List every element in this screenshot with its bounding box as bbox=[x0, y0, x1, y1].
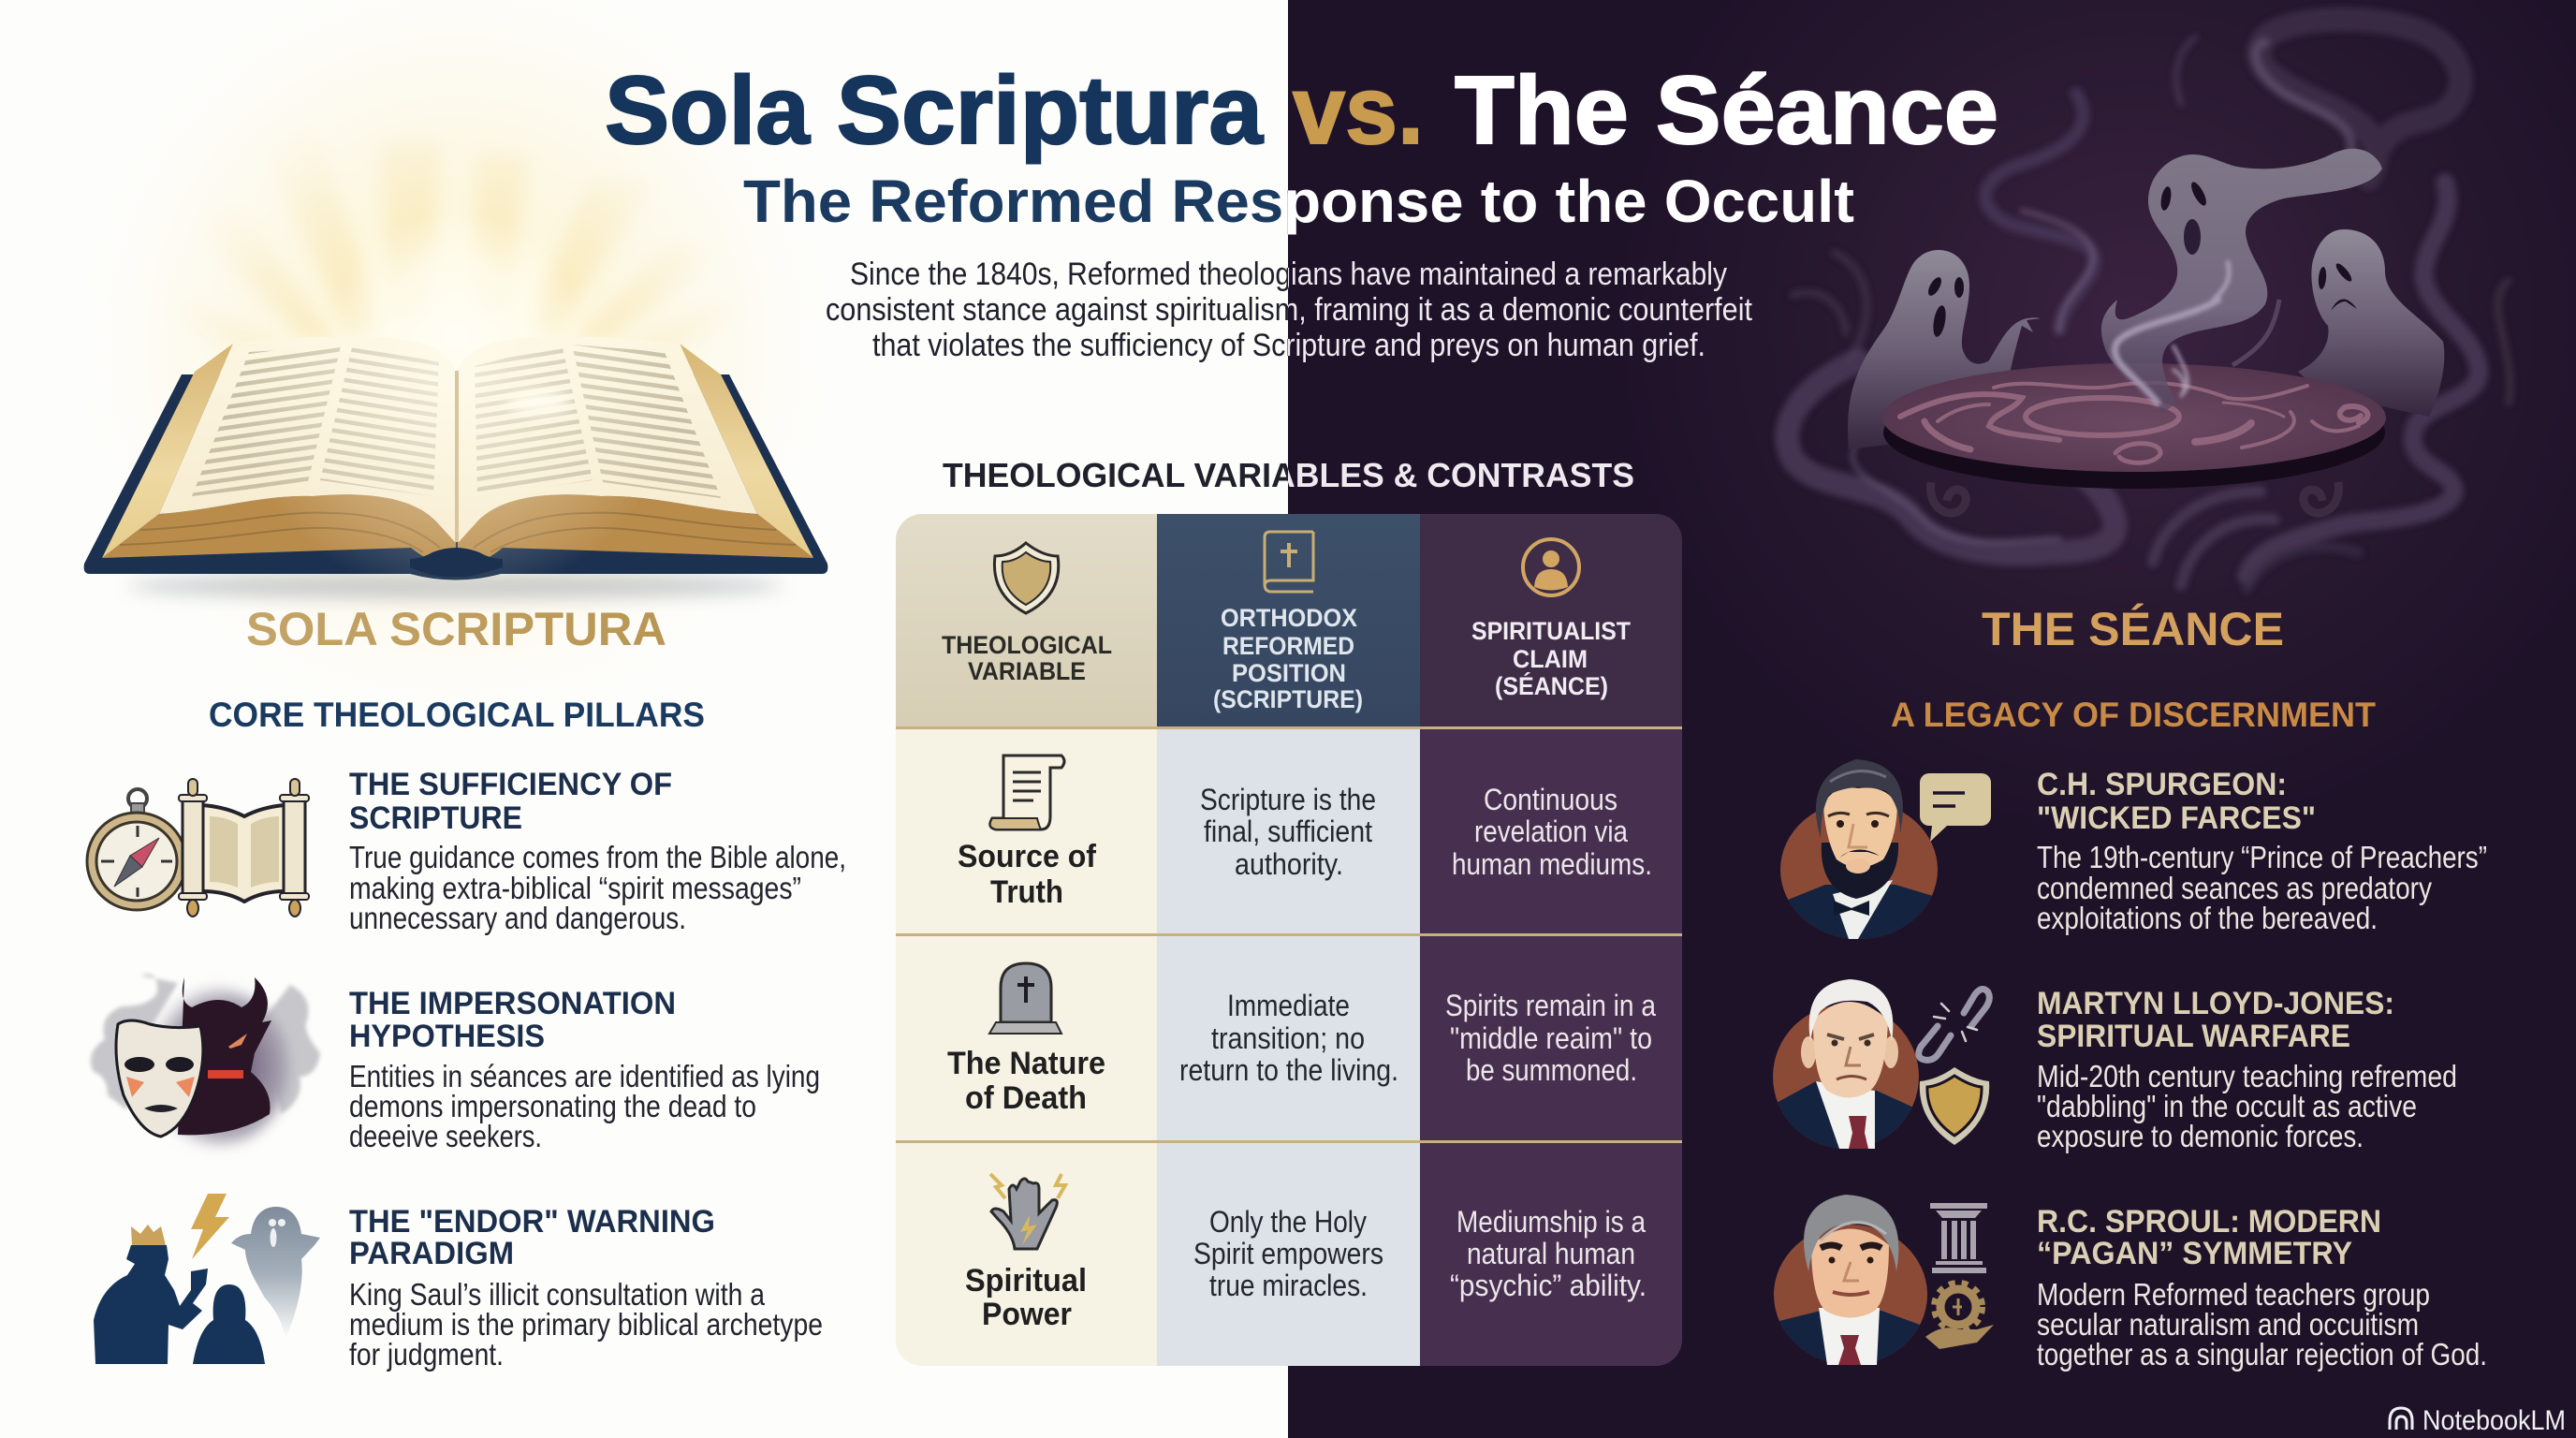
row: the nature of death: "middle reaim" to bbox=[1450, 1021, 1652, 1055]
subtitle: The Reformed Response to the Occult bbox=[743, 168, 1854, 235]
icon: gear and hand bbox=[1925, 1283, 1994, 1349]
Spurgeon text: exploitations of the bereaved. bbox=[2037, 901, 2378, 935]
icon: scroll bbox=[990, 756, 1064, 829]
Spurgeon heading bbox=[2037, 767, 2316, 836]
ghost right bbox=[2298, 229, 2444, 417]
intro paragraph: consistent stance against spiritualism, framing it as a demonic counterfeit bbox=[826, 292, 1752, 328]
Lloyd-Jones heading: MARTYN LLOYD-JONES: bbox=[2037, 986, 2394, 1021]
row: spiritual power: Power bbox=[982, 1297, 1072, 1332]
portrait: Lloyd-Jones bbox=[1764, 979, 1928, 1156]
comparison table bbox=[896, 514, 1682, 1366]
row: source of truth: Continuous bbox=[1484, 783, 1617, 816]
row: source of truth: authority. bbox=[1235, 847, 1343, 881]
icon: speech bubble bbox=[1920, 773, 1991, 842]
gilded page block bbox=[102, 344, 813, 558]
intro paragraph bbox=[826, 257, 1752, 363]
séance background glow bbox=[1610, 0, 2576, 843]
heading: Sola Scriptura: SOLA SCRIPTURA bbox=[246, 603, 666, 655]
column header: orthodox reformed position: ORTHODOX bbox=[1221, 604, 1357, 632]
intro paragraph: that violates the sufficiency of Scripture and preys on human grief. bbox=[872, 328, 1705, 363]
column header: orthodox reformed position bbox=[1213, 532, 1363, 713]
Sproul text: Modern Reformed teachers group bbox=[2037, 1277, 2430, 1312]
spine bbox=[410, 548, 503, 577]
row: source of truth: Scripture is the bbox=[1200, 783, 1376, 816]
icon: NotebookLM mark bbox=[2390, 1408, 2412, 1430]
pillar 1 text bbox=[349, 840, 846, 935]
ghost left bbox=[1848, 250, 2041, 449]
panel: pillar 2 impersonation hypothesis bbox=[91, 974, 820, 1153]
row: spiritual power: true miracles. bbox=[1209, 1269, 1368, 1302]
pillar 2 text: demons impersonating the dead to bbox=[349, 1089, 756, 1123]
column header: theological variable: VARIABLE bbox=[968, 657, 1086, 685]
illustration: séance table with ghosts and smoke bbox=[1787, 20, 2510, 590]
row: source of truth: Truth bbox=[990, 874, 1063, 910]
row: the nature of death: Immediate bbox=[1227, 989, 1350, 1022]
icon: compass and scroll bbox=[87, 779, 309, 917]
pillar 2 heading: THE IMPERSONATION bbox=[349, 986, 676, 1021]
row: the nature of death: The Nature bbox=[947, 1046, 1105, 1081]
title: vs. bbox=[1293, 56, 1424, 164]
icon: bible bbox=[1265, 532, 1313, 592]
Spurgeon text: condemned seances as predatory bbox=[2037, 871, 2432, 905]
Sproul text bbox=[2037, 1277, 2487, 1372]
pillar 2 text bbox=[349, 1059, 820, 1153]
illustration: open Bible with light rays bbox=[63, 0, 849, 740]
title: The Séance bbox=[1455, 56, 1998, 164]
Lloyd-Jones heading bbox=[2037, 986, 2394, 1054]
background: light left half bbox=[0, 0, 1288, 1438]
pillar 2 text: Entities in séances are identified as lying bbox=[349, 1059, 820, 1093]
column header: theological variable: THEOLOGICAL bbox=[942, 631, 1112, 659]
row: the nature of death: transition; no bbox=[1211, 1021, 1365, 1055]
pillar 3 text: King Saul’s illicit consultation with a bbox=[349, 1277, 766, 1312]
row: the nature of death: of Death bbox=[965, 1080, 1087, 1116]
column header: orthodox reformed position: REFORMED bbox=[1222, 632, 1354, 660]
panel: Spurgeon bbox=[1778, 759, 2487, 946]
row: the nature of death: Spirits remain in a bbox=[1445, 989, 1656, 1022]
column header: spiritualist claim: SPIRITUALIST bbox=[1471, 617, 1631, 645]
heading: The Séance: THE SÉANCE bbox=[1982, 603, 2284, 655]
title bbox=[605, 56, 1998, 164]
shadow bbox=[128, 573, 783, 599]
title: Sola Scriptura bbox=[605, 56, 1264, 164]
portrait: Spurgeon bbox=[1778, 759, 1942, 946]
pillar 3 text bbox=[349, 1277, 823, 1372]
pillar 1 text: unnecessary and dangerous. bbox=[349, 901, 686, 935]
icon: medium circle bbox=[1523, 539, 1579, 595]
icon: shield bbox=[994, 543, 1059, 613]
row: the nature of death: return to the living. bbox=[1179, 1053, 1398, 1087]
light rays bbox=[63, 0, 849, 740]
row: source of truth: Source of bbox=[958, 839, 1097, 874]
column header: orthodox reformed position: (SCRIPTURE) bbox=[1213, 685, 1363, 713]
Lloyd-Jones text: Mid-20th century teaching refremed bbox=[2037, 1059, 2457, 1093]
pillar 1 text: making extra-biblical “spirit messages” bbox=[349, 871, 801, 905]
back smoke bbox=[1787, 20, 2510, 590]
pages bbox=[159, 336, 455, 542]
Lloyd-Jones text bbox=[2037, 1059, 2457, 1153]
column header: spiritualist claim: (SÉANCE) bbox=[1495, 671, 1608, 700]
panel: Sproul bbox=[1764, 1195, 2487, 1372]
panel: pillar 1 sufficiency of scripture bbox=[87, 767, 846, 935]
pillar 2 heading bbox=[349, 986, 676, 1054]
heading: a legacy of discernment: A LEGACY OF DISCERNMENT bbox=[1891, 696, 2376, 734]
Lloyd-Jones heading: SPIRITUAL WARFARE bbox=[2037, 1019, 2350, 1054]
Spurgeon heading: C.H. SPURGEON: bbox=[2037, 767, 2287, 802]
pillar 3 heading: THE "ENDOR" WARNING bbox=[349, 1204, 715, 1240]
row: the nature of death: be summoned. bbox=[1466, 1053, 1637, 1087]
row: source of truth: human mediums. bbox=[1452, 847, 1652, 881]
background: dark right half bbox=[1288, 0, 2576, 1438]
Spurgeon text: The 19th-century “Prince of Preachers” bbox=[2037, 840, 2487, 874]
row: spiritual power: “psychic” ability. bbox=[1450, 1269, 1647, 1302]
pillar 1 heading: SCRIPTURE bbox=[349, 800, 522, 836]
pillar 3 heading: PARADIGM bbox=[349, 1236, 514, 1271]
pillar 2 text: deeeive seekers. bbox=[349, 1119, 542, 1153]
row: spiritual power bbox=[965, 1174, 1647, 1332]
row: spiritual power: Spirit empowers bbox=[1193, 1237, 1383, 1270]
pillar 1 heading bbox=[349, 767, 672, 836]
intro paragraph: Since the 1840s, Reformed theologians have maintained a remarkably bbox=[850, 257, 1727, 292]
column header: spiritualist claim: CLAIM bbox=[1513, 645, 1588, 673]
pillar 1 text: True guidance comes from the Bible alone, bbox=[349, 840, 846, 874]
row: source of truth bbox=[958, 756, 1652, 910]
Sproul heading bbox=[2037, 1204, 2381, 1271]
Sproul heading: R.C. SPROUL: MODERN bbox=[2037, 1204, 2381, 1240]
icon: mask and demon bbox=[91, 974, 320, 1148]
row: spiritual power: Mediumship is a bbox=[1456, 1205, 1646, 1239]
icon: pillar bbox=[1930, 1203, 1987, 1273]
Sproul text: together as a singular rejection of God. bbox=[2037, 1337, 2487, 1372]
column header: theological variable bbox=[942, 543, 1112, 685]
table cell backgrounds bbox=[896, 514, 1682, 1366]
table bbox=[1882, 363, 2386, 489]
row: source of truth: revelation via bbox=[1474, 814, 1628, 848]
icon: shield bbox=[1920, 1067, 1989, 1145]
portrait: Sproul bbox=[1774, 1195, 1927, 1365]
pillar 3 heading bbox=[349, 1204, 715, 1271]
cover bbox=[84, 374, 827, 580]
icon: Saul, medium, ghost and lightning bbox=[94, 1194, 320, 1364]
pillar 1 heading: THE SUFFICIENCY OF bbox=[349, 767, 672, 802]
Sproul text: secular naturalism and occuitism bbox=[2037, 1307, 2419, 1342]
Lloyd-Jones text: exposure to demonic forces. bbox=[2037, 1119, 2364, 1153]
ghost centre with rising smoke bbox=[2101, 149, 2382, 414]
icon: hand with lightning bbox=[990, 1174, 1065, 1249]
Spurgeon heading: "WICKED FARCES" bbox=[2037, 800, 2316, 836]
pillar 3 text: medium is the primary biblical archetype bbox=[349, 1307, 823, 1342]
panel: pillar 3 Endor warning bbox=[94, 1194, 823, 1372]
pillar 3 text: for judgment. bbox=[349, 1337, 504, 1372]
page text lines bbox=[192, 344, 721, 498]
heading: theological variables and contrasts: THEOLOGICAL VARIABLES & CONTRASTS bbox=[943, 456, 1634, 494]
Sproul heading: “PAGAN” SYMMETRY bbox=[2037, 1236, 2352, 1271]
row: spiritual power: Only the Holy bbox=[1209, 1205, 1367, 1239]
row: source of truth: final, sufficient bbox=[1204, 814, 1372, 848]
icon: tombstone bbox=[989, 963, 1061, 1034]
Lloyd-Jones text: "dabbling" in the occult as active bbox=[2037, 1089, 2417, 1123]
panel: Lloyd-Jones bbox=[1764, 979, 2457, 1156]
pillar 2 heading: HYPOTHESIS bbox=[349, 1019, 545, 1054]
table legs bbox=[1931, 482, 2338, 513]
column header: orthodox reformed position: POSITION bbox=[1232, 659, 1346, 687]
row: spiritual power: natural human bbox=[1467, 1237, 1635, 1270]
row: spiritual power: Spiritual bbox=[965, 1263, 1087, 1299]
Spurgeon text bbox=[2037, 840, 2487, 935]
icon: broken chain bbox=[1919, 989, 1989, 1060]
column header: spiritualist claim bbox=[1471, 539, 1631, 700]
row: the nature of death bbox=[947, 963, 1656, 1116]
heading: core theological pillars: CORE THEOLOGICAL PILLARS bbox=[209, 696, 705, 734]
